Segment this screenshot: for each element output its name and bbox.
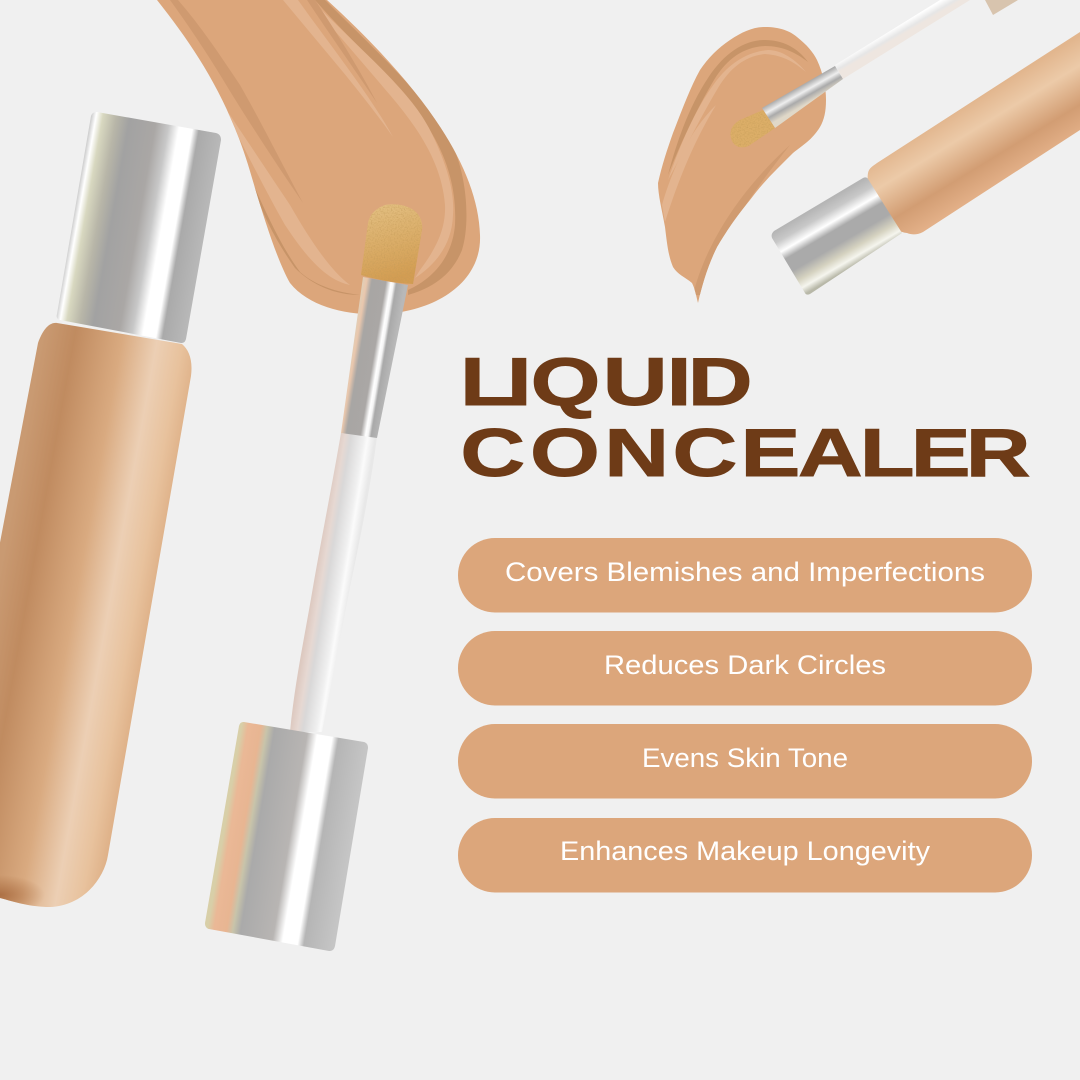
benefit pill: covers blemishes (458, 538, 1032, 612)
benefit pill: dark circles: Reduces Dark Circles (604, 650, 886, 680)
benefit pill: dark circles (458, 631, 1032, 706)
ferrule (762, 66, 843, 128)
cap (57, 112, 221, 343)
title (460, 344, 1031, 491)
body (0, 323, 192, 907)
benefit pill: covers blemishes: Covers Blemishes and Imperfections (505, 557, 985, 587)
silver ferrule (341, 277, 408, 438)
large concealer smear (150, 0, 490, 320)
distant wand piece (985, 0, 1018, 15)
benefit pill: makeup longevity: Enhances Makeup Longevity (560, 836, 931, 866)
body (868, 32, 1080, 234)
benefit pill: skin tone: Evens Skin Tone (642, 743, 848, 773)
applicator wand (205, 204, 422, 951)
cap (205, 722, 368, 951)
sponge (730, 110, 775, 147)
wand (835, 0, 970, 79)
large tube, left (0, 112, 221, 915)
cap (772, 177, 902, 295)
small concealer smear (658, 27, 826, 303)
title: LIQUID (460, 344, 753, 420)
sponge tip (361, 204, 422, 284)
small tube, top right (730, 0, 1080, 295)
benefit pill: makeup longevity (458, 818, 1032, 892)
benefit pill: skin tone (458, 724, 1032, 798)
bottom shading (0, 879, 40, 906)
white stem (290, 433, 377, 732)
title: CONCEALER (460, 415, 1031, 491)
